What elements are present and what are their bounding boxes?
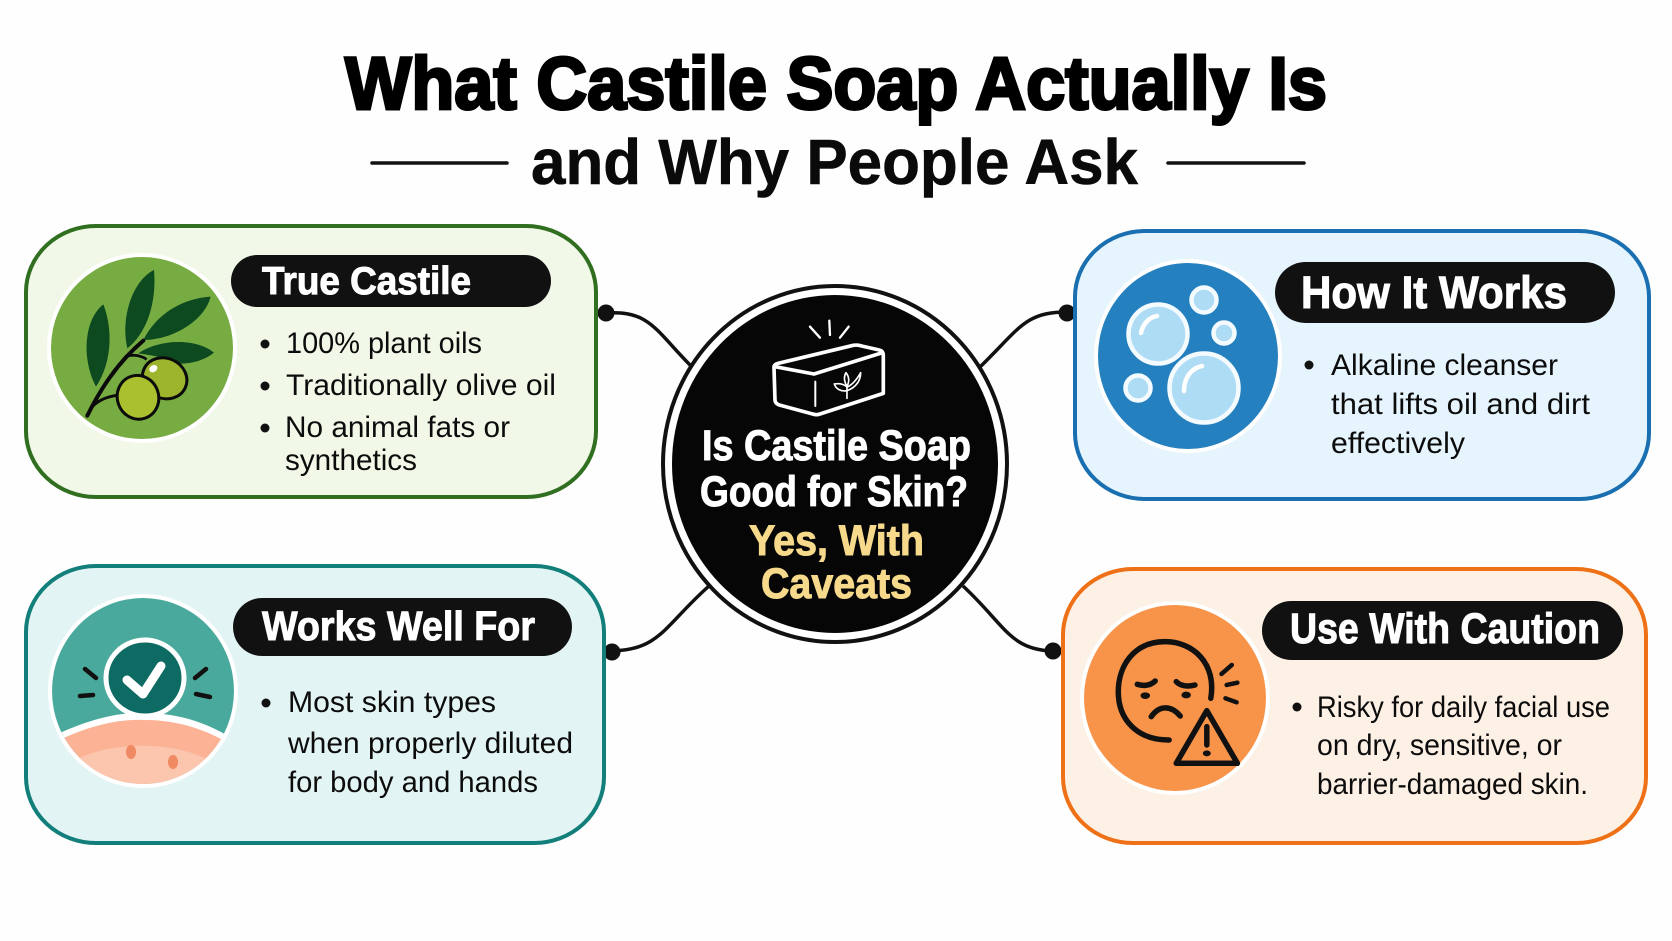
bullet list: True Castile: No animal fats or xyxy=(285,411,510,444)
badge answer: Caveats xyxy=(761,560,912,608)
bullet list: Use With Caution xyxy=(1292,691,1610,801)
badge answer xyxy=(749,517,924,608)
bullet list: Works Well For: Most skin types xyxy=(288,686,496,719)
bullet list: True Castile: synthetics xyxy=(285,444,417,477)
heading pill: True Castile: True Castile xyxy=(262,260,471,303)
heading pill: How It Works xyxy=(1275,262,1615,323)
bullet list: True Castile xyxy=(260,327,556,477)
panel: Use With Caution xyxy=(1063,569,1646,843)
connector: center to True Castile xyxy=(598,304,692,367)
panel: Works Well For xyxy=(26,566,604,843)
bullet list: How It Works: that lifts oil and dirt xyxy=(1331,388,1591,421)
connector: center to How It Works xyxy=(980,304,1076,367)
title: and Why People Ask xyxy=(531,126,1138,198)
bullet list: Use With Caution: Risky for daily facial use xyxy=(1317,691,1610,724)
bullet list: Works Well For: when properly diluted xyxy=(287,727,573,760)
title: What Castile Soap Actually Is xyxy=(345,42,1327,125)
bullet list: How It Works: Alkaline cleanser xyxy=(1331,349,1558,382)
bullet list: True Castile: Traditionally olive oil xyxy=(286,369,556,402)
badge question: Is Castile Soap xyxy=(702,422,971,470)
heading pill: How It Works: How It Works xyxy=(1301,267,1567,318)
panel: How It Works xyxy=(1075,231,1649,499)
title xyxy=(345,42,1327,198)
heading pill: Works Well For: Works Well For xyxy=(262,603,535,649)
icon: skin with check mark xyxy=(48,594,238,788)
panel: True Castile xyxy=(26,226,596,497)
badge answer: Yes, With xyxy=(749,517,924,565)
bullet list: Works Well For: for body and hands xyxy=(288,766,538,799)
central badge xyxy=(663,286,1007,642)
bullet list: Works Well For xyxy=(262,686,573,799)
icon: soap bar xyxy=(774,321,883,415)
bullet list: How It Works: effectively xyxy=(1331,427,1465,460)
badge question xyxy=(700,422,971,516)
icon: soap bubbles xyxy=(1094,259,1282,453)
bullet list: Use With Caution: barrier-damaged skin. xyxy=(1317,768,1588,801)
icon: sad face with warning triangle xyxy=(1080,601,1270,795)
bullet list: How It Works xyxy=(1304,349,1591,460)
bullet list: True Castile: 100% plant oils xyxy=(286,327,482,360)
heading pill: Works Well For xyxy=(233,598,572,656)
connector: center to Works Well For xyxy=(604,586,709,660)
bullet list: Use With Caution: on dry, sensitive, or xyxy=(1317,729,1562,762)
heading pill: True Castile xyxy=(231,255,551,307)
badge question: Good for Skin? xyxy=(700,468,968,516)
heading pill: Use With Caution: Use With Caution xyxy=(1290,605,1600,653)
connector: center to Use With Caution xyxy=(963,586,1062,660)
icon: olive branch xyxy=(47,253,237,443)
